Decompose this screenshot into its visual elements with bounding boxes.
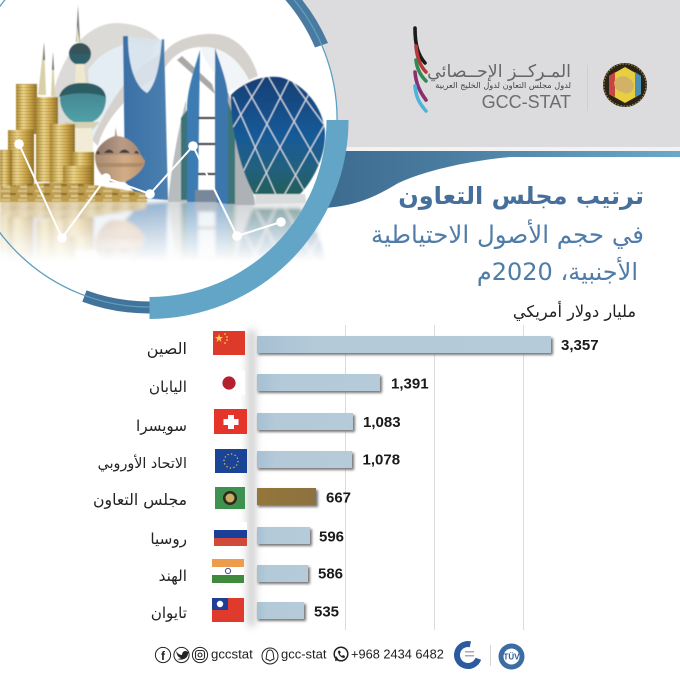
row: India 586: الهند [159,567,187,585]
icon: whatsapp [334,647,348,661]
background grey header [280,0,680,151]
row: Switzerland 1,083 [136,409,401,435]
row: China 3,357: الصين [147,339,187,359]
logo: GCC-STAT [415,28,571,112]
title [371,182,644,286]
icon: snapchat [262,648,278,664]
dark arc top right [285,0,328,48]
row: Russia 596 [150,522,344,548]
row: Japan 1,391: اليابان [149,378,187,396]
row: GCC 667 [93,487,351,510]
handle: gcc-stat: gcc-stat [281,646,327,662]
white photo circle [0,0,337,307]
row: India 586: 586 [318,566,343,582]
handle: gccstat: gccstat [211,646,253,662]
illustration: Gulf landmarks and gold coins [0,6,326,258]
row: Japan 1,391: 1,391 [391,376,429,392]
white trend line with markers [14,139,286,243]
row: Russia 596: روسيا [150,530,187,548]
light blue arc [150,120,348,319]
landmarks [0,5,328,205]
divider [490,645,491,666]
logo subtitle: لدول مجلس التعاون لدول الخليج العربية [435,80,571,90]
row: Taiwan 535: تايوان [151,604,187,622]
unit label: مليار دولار أمريكي [513,301,636,322]
divider [587,65,588,111]
icon: twitter [174,647,189,663]
dark arc bottom [82,290,150,314]
row: Switzerland 1,083: سويسرا [136,417,187,435]
footer contact bar [155,641,524,670]
row: European Union 1,078: 1,078 [362,452,400,468]
icon: ribbon [415,28,426,111]
badge: quality mark [454,641,482,669]
row: China 3,357: 3,357 [561,337,599,354]
badge: TUV [498,644,524,670]
icon: instagram [192,647,208,663]
title line 2: في حجم الأصول الاحتياطية [371,219,644,249]
row: Taiwan 535: 535 [314,604,339,620]
icon: facebook: f [161,649,166,663]
row: GCC 667: مجلس التعاون [93,490,187,510]
row: European Union 1,078 [98,449,400,473]
phone number: +968 2434 6482 [351,646,444,662]
reflection of landmarks [0,196,324,258]
logo latin name: GCC-STAT [482,92,571,112]
row: China 3,357 [147,331,599,359]
row: European Union 1,078: الاتحاد الأوروبي [98,454,187,472]
bar chart [93,325,599,630]
icon: facebook [155,647,171,663]
title line 3: الأجنبية، 2020م [477,257,638,286]
blue swoosh band [318,151,680,208]
thin ring [0,0,337,307]
gridlines and axis shadow [247,325,524,630]
row: Taiwan 535 [151,598,339,622]
badge: TUV: TÜV [504,652,520,662]
row: Switzerland 1,083: 1,083 [363,414,401,431]
circular frame arcs [0,0,348,319]
row: Japan 1,391 [149,371,429,396]
logo arabic name: المـركــز الإحــصائي [427,62,571,82]
row: GCC 667: 667 [326,490,351,506]
row: Russia 596: 596 [319,528,344,546]
emblem: GCC [603,63,647,107]
row: India 586 [159,559,343,585]
title line 1: ترتيب مجلس التعاون [398,182,644,210]
